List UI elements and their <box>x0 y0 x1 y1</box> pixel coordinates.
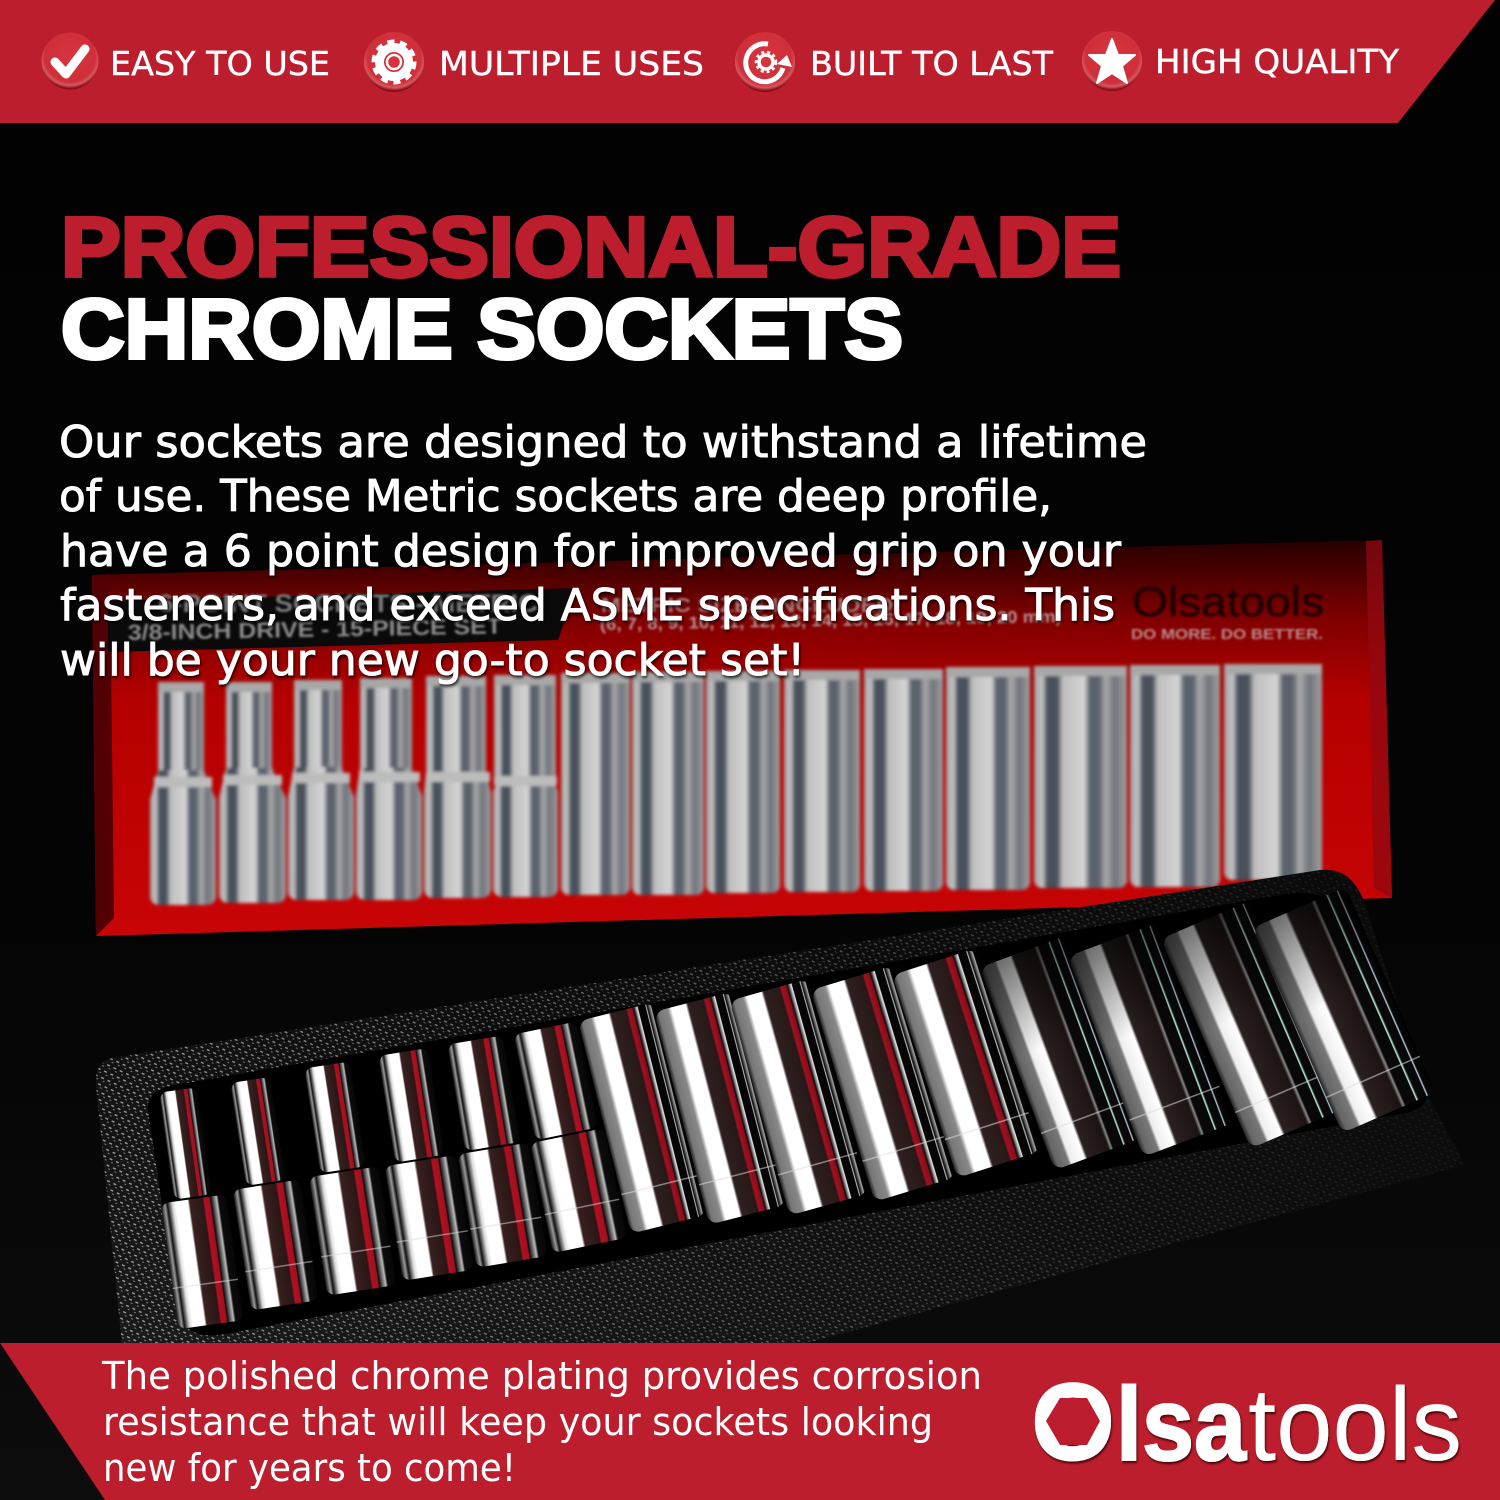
label: built to last: BUILT TO LAST <box>810 44 1054 83</box>
product box <box>92 540 1392 936</box>
banner background <box>0 0 1495 123</box>
bottom banner <box>0 1343 1500 1500</box>
headline <box>61 200 1121 376</box>
body paragraph: fasteners, and exceed ASME specifications. This <box>60 580 1115 631</box>
box sockets image <box>150 664 1322 905</box>
box label text: 6-POINT SOCKETS - METRIC <box>158 590 538 618</box>
tray recess <box>148 893 1427 1336</box>
icon: check mark <box>42 32 98 90</box>
feature: high quality <box>1082 31 1400 91</box>
logo: Olsatools: O <box>1032 1361 1114 1482</box>
logo: Olsatools <box>1032 1361 1462 1483</box>
feature: easy to use <box>42 32 330 90</box>
label: multiple uses: MULTIPLE USES <box>439 44 704 83</box>
box label: black title strip <box>108 588 576 652</box>
top banner <box>0 0 1495 123</box>
body paragraph: of use. These Metric sockets are deep profile, <box>59 471 1052 522</box>
box label text: Olsatools <box>1132 578 1324 625</box>
callout text: The polished chrome plating provides corrosion <box>101 1354 982 1398</box>
caps and shoulder bands <box>158 669 1322 687</box>
box right flap <box>1366 540 1392 898</box>
feature: multiple uses <box>364 32 704 92</box>
icon: gear <box>364 32 424 92</box>
callout text: resistance that will keep your sockets looking <box>103 1400 933 1444</box>
box label text: DO MORE. DO BETTER. <box>1131 626 1323 643</box>
headline line 1: PROFESSIONAL-GRADE <box>61 200 1121 294</box>
icon: star <box>1082 31 1142 91</box>
feature: built to last <box>735 32 1054 92</box>
box label text <box>128 578 1324 645</box>
box front panel <box>92 540 1392 936</box>
tray body <box>96 870 1465 1345</box>
banner background <box>0 1343 1500 1500</box>
body paragraph: have a 6 point design for improved grip on your <box>60 526 1122 577</box>
icon: cycle gear <box>735 32 795 92</box>
tray texture <box>96 870 1465 1345</box>
body paragraph: Our sockets are designed to withstand a lifetime <box>59 417 1147 468</box>
body paragraph <box>59 417 1147 686</box>
callout text: new for years to come! <box>103 1446 516 1490</box>
box label text: METRIC SIZES INCLUDED: <box>601 595 901 617</box>
headline line 2: CHROME SOCKETS <box>61 282 903 376</box>
box label text: (6, 7, 8, 9, 10, 11, 12, 13, 14, 15, 16, 17, 18, 19, 20 mm) <box>600 607 1062 634</box>
box label text: 3/8-INCH DRIVE - 15-PIECE SET <box>128 613 503 645</box>
chrome sockets in tray <box>145 887 1436 1329</box>
label: high quality: HIGH QUALITY <box>1155 42 1400 81</box>
label: easy to use: EASY TO USE <box>110 44 330 83</box>
body paragraph: will be your new go-to socket set! <box>60 635 805 686</box>
socket tray <box>96 870 1465 1345</box>
logo: Olsatools: tools <box>1248 1367 1462 1483</box>
logo: Olsatools: lsa <box>1116 1367 1247 1483</box>
callout text <box>101 1354 982 1490</box>
box left edge <box>92 574 114 936</box>
